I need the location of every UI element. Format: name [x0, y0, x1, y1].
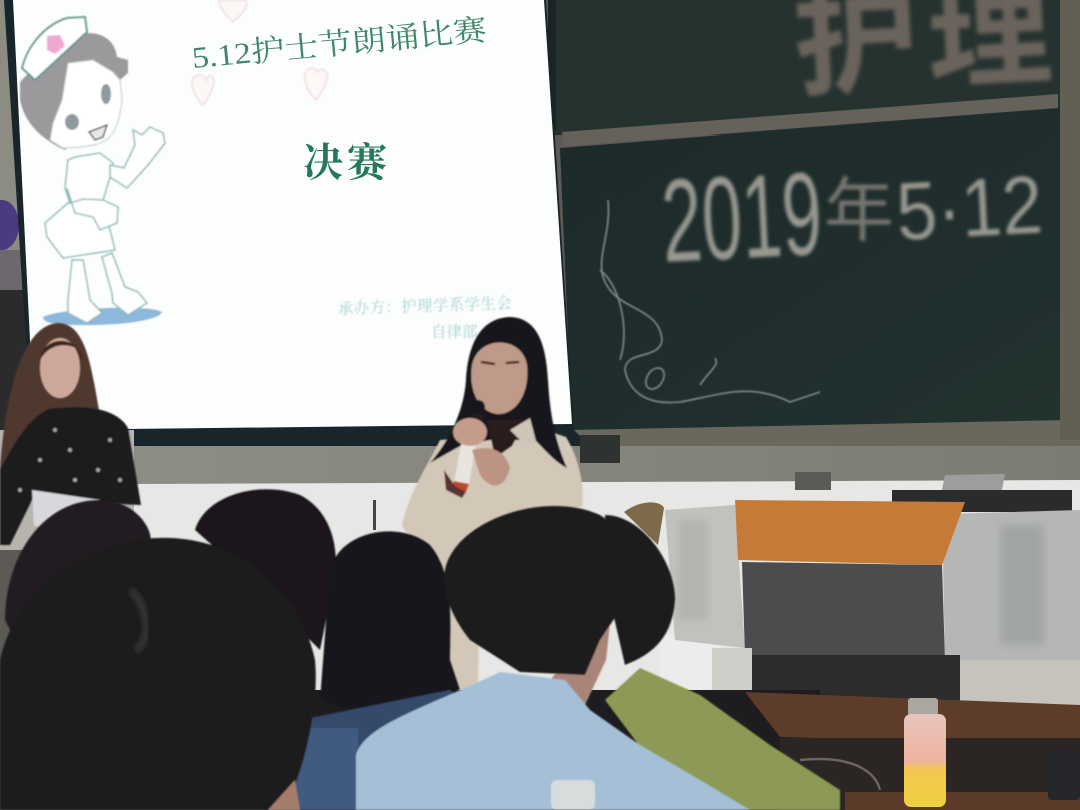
blackboard upper panel: [552, 0, 1080, 135]
girl blue top: [290, 690, 462, 810]
lower wall band: [0, 430, 1080, 700]
black object right: [1048, 750, 1080, 800]
green jacket: [605, 668, 840, 810]
leopard bag: [624, 502, 664, 545]
organiser text: 承办方：护理学系学生会: [338, 294, 513, 318]
mouth: [89, 125, 107, 140]
face: [471, 342, 527, 414]
water bottle: [551, 780, 595, 810]
chalk date: 2019: [658, 148, 825, 288]
nurse cartoon: [20, 17, 165, 325]
black dotted blouse: [0, 407, 141, 545]
man neck and ear: [550, 605, 612, 705]
blackboard lower panel: [560, 108, 1066, 430]
chalk date: [658, 148, 1045, 288]
left wall strip with purple balloon: [0, 0, 30, 430]
arm raised: [110, 127, 165, 188]
head: back left small: [5, 500, 151, 630]
denim jacket: [356, 672, 750, 810]
mic head and handle: [471, 400, 485, 414]
chalk date: 年: [824, 172, 894, 250]
jacket: [402, 425, 583, 690]
dark collar: [487, 420, 526, 458]
head: front left large: [0, 538, 316, 810]
dark floor under audience: [300, 690, 820, 810]
lectern desk console: [665, 474, 1080, 710]
cap: [22, 17, 87, 80]
girl at left: [0, 323, 141, 545]
slide title: 5.12护士节朗诵比赛: [191, 14, 488, 75]
legs: [68, 253, 147, 323]
presenter woman: [402, 317, 583, 690]
organiser text second line: 自律部: [431, 323, 478, 341]
long hair: [0, 323, 118, 480]
head: long hair girl: [320, 531, 460, 710]
hair: [430, 317, 567, 468]
projection screen: [13, 0, 572, 429]
paper held: [32, 490, 100, 530]
audience heads: [0, 489, 840, 810]
board frame ledges: [548, 0, 1080, 462]
hair: [20, 33, 128, 150]
face: [50, 60, 122, 148]
orange lid: [735, 500, 965, 565]
floor shadow: [43, 308, 162, 325]
heart outlines: [192, 0, 328, 105]
face: [40, 338, 80, 398]
hands: [453, 418, 487, 446]
head: centre left: [195, 489, 336, 650]
bodice: [65, 153, 113, 203]
arm across: [67, 188, 118, 230]
wooden table: [745, 692, 1080, 810]
collar flap: [510, 418, 537, 445]
cuff: [444, 470, 466, 498]
screen black frame: [4, 0, 590, 448]
head: back right: [605, 515, 675, 665]
slide subtitle: 决赛: [303, 140, 390, 185]
juice bottle: [904, 698, 946, 807]
head: centre man: [444, 506, 635, 675]
chalk date: 5·12: [894, 159, 1045, 258]
eyes: [101, 84, 111, 104]
skirt: [45, 200, 115, 258]
chalk vine doodle: [600, 200, 820, 403]
